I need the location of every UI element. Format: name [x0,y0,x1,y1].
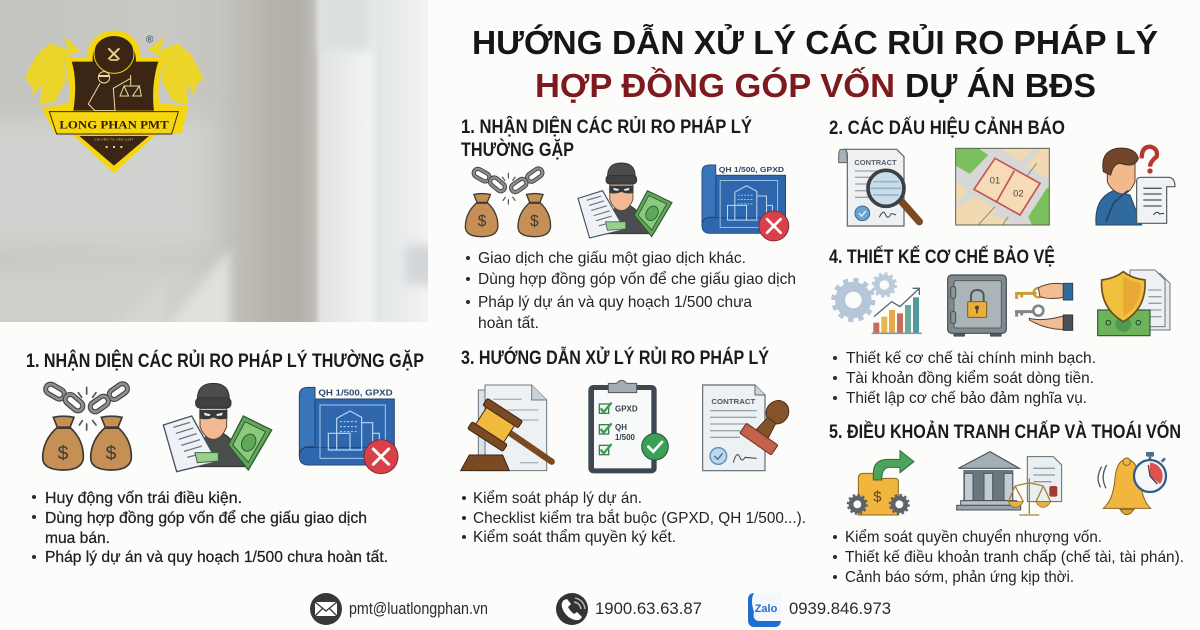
icon: checklist clipboard: 1/500 [615,433,636,442]
contact footer [310,593,891,627]
icon: checklist clipboard: QH [615,423,627,432]
icon: masked thief [163,383,272,472]
heading: 4. THIẾT KẾ CƠ CHẾ BẢO VỆ [829,246,1055,268]
icon: checklist clipboard: GPXD [615,404,638,413]
phone number: 1900.63.63.87 [595,600,702,618]
bullet list: Pháp lý dự án và quy hoạch 1/500 chưa hoàn tất. [45,549,388,566]
heading [461,116,752,161]
icon: lady justice [88,72,141,111]
logo banner [49,112,178,134]
icon: blueprint with cross [702,164,789,241]
bullet list: Tài khoản đồng kiểm soát dòng tiền. [846,369,1094,387]
shield interior [72,36,158,111]
icon: dragons [25,36,203,105]
icon: courthouse, scales and document [957,452,1062,515]
icon: blueprint with cross: QH 1/500, GPXD [719,165,785,174]
heading: 2. CÁC DẤU HIỆU CẢNH BÁO [829,117,1065,139]
heading: 1. NHẬN DIỆN CÁC RỦI RO PHÁP LÝ THƯỜNG GẶP [26,350,424,372]
panel: section 5 [829,421,1184,586]
logo tagline: CHUYÊN TƯ VẤN LUẬT [94,136,134,141]
icon: blueprint with cross [299,387,398,474]
heading: 1. NHẬN DIỆN CÁC RỦI RO PHÁP LÝ [461,116,752,138]
bullet list: Giao dịch che giấu một giao dịch khác. [478,250,746,267]
bullet list: Checklist kiểm tra bắt buộc (GPXD, QH 1/500...). [473,508,806,527]
icon: land parcel map [952,148,1053,228]
icon: confused person with document [1096,147,1175,225]
bullet list: Dùng hợp đồng góp vốn để che giấu giao dịch [45,509,367,527]
logo lower point [79,136,149,166]
bullet list [833,350,1096,407]
panel: section 1 [461,116,796,332]
bullet list [466,250,796,332]
icon: land parcel map: 02 [1013,189,1024,199]
icon: gears and growth chart [834,274,922,333]
icon: Zalo: Zalo [755,603,778,615]
icon: contract and stamp [703,385,800,471]
icon: capital transfer folder with gears: $ [873,490,881,506]
bullet list: Thiết kế cơ chế tài chính minh bạch. [846,350,1096,367]
icon: money bags with broken chain [465,167,551,237]
bullet list: Dùng hợp đồng góp vốn để che giấu giao dịch [478,270,796,288]
bullet list: Kiểm soát quyền chuyển nhượng vốn. [845,528,1102,546]
panel: left section 1 [26,350,424,566]
heading: THƯỜNG GẶP [461,139,574,161]
heading: 3. HƯỚNG DẪN XỬ LÝ RỦI RO PHÁP LÝ [461,347,769,369]
icon: checklist clipboard [588,380,668,473]
icon: contract under magnifier: CONTRACT [854,158,897,167]
panel: section 2 [829,117,1175,228]
icon: money bags with broken chain: $ [478,213,487,230]
Zalo number: 0939.846.973 [789,600,891,618]
registered mark: ® [146,34,154,45]
panel: section 3 [461,347,806,546]
icon: email [310,593,342,625]
crest: arch emblem [94,33,134,73]
bullet list: mua bán. [45,530,110,547]
icon: gavel on document [461,385,552,471]
bullet list [32,490,388,566]
bullet list [833,528,1184,586]
logo name: LONG PHAN PMT [59,117,169,131]
shield outline [42,31,188,173]
icon: masked thief [578,163,672,238]
bullet list: Huy động vốn trái điều kiện. [45,490,242,507]
title [472,24,1158,104]
title: HƯỚNG DẪN XỬ LÝ CÁC RỦI RO PHÁP LÝ [472,24,1158,61]
bullet list: Kiểm soát pháp lý dự án. [473,489,642,507]
icon: land parcel map: 01 [990,175,1000,185]
icon: contract and stamp: CONTRACT [711,397,756,406]
bullet list: hoàn tất. [478,315,539,332]
bullet list [462,489,806,546]
icon: blueprint with cross: QH 1/500, GPXD [318,387,393,397]
icon: money bags with broken chain [43,382,131,470]
icon: capital transfer folder with gears [848,451,914,515]
logo: Long Phan PMT [25,31,203,173]
icon: safe with padlock [948,275,1006,337]
bullet list: Cảnh báo sớm, phản ứng kịp thời. [845,569,1074,586]
bullet list: Pháp lý dự án và quy hoạch 1/500 chưa [478,294,752,311]
panel: section 4 [829,246,1170,407]
icon: key handover hands [1015,283,1073,330]
icon: phone [556,593,588,625]
icon: shield, money and documents [1098,270,1170,336]
icon: money bags with broken chain: $ [530,213,539,230]
bullet list: Thiết lập cơ chế bảo đảm nghĩa vụ. [846,390,1087,407]
blurred photo panel [0,0,428,322]
icon: money bags with broken chain: $ [58,443,69,464]
bullet list: Thiết kế điều khoản tranh chấp (chế tài, tài phán). [845,549,1184,566]
email address: pmt@luatlongphan.vn [349,600,488,618]
icon: contract under magnifier [839,149,919,226]
bullet list: Kiểm soát thẩm quyền ký kết. [473,528,676,546]
title: HỢP ĐỒNG GÓP VỐN [535,66,895,104]
title: DỰ ÁN BĐS [905,67,1096,104]
icon: Zalo [748,593,781,627]
logo dots [106,146,122,148]
icon: money bags with broken chain: $ [106,443,117,464]
icon: alarm bell with stopwatch [1098,452,1166,515]
